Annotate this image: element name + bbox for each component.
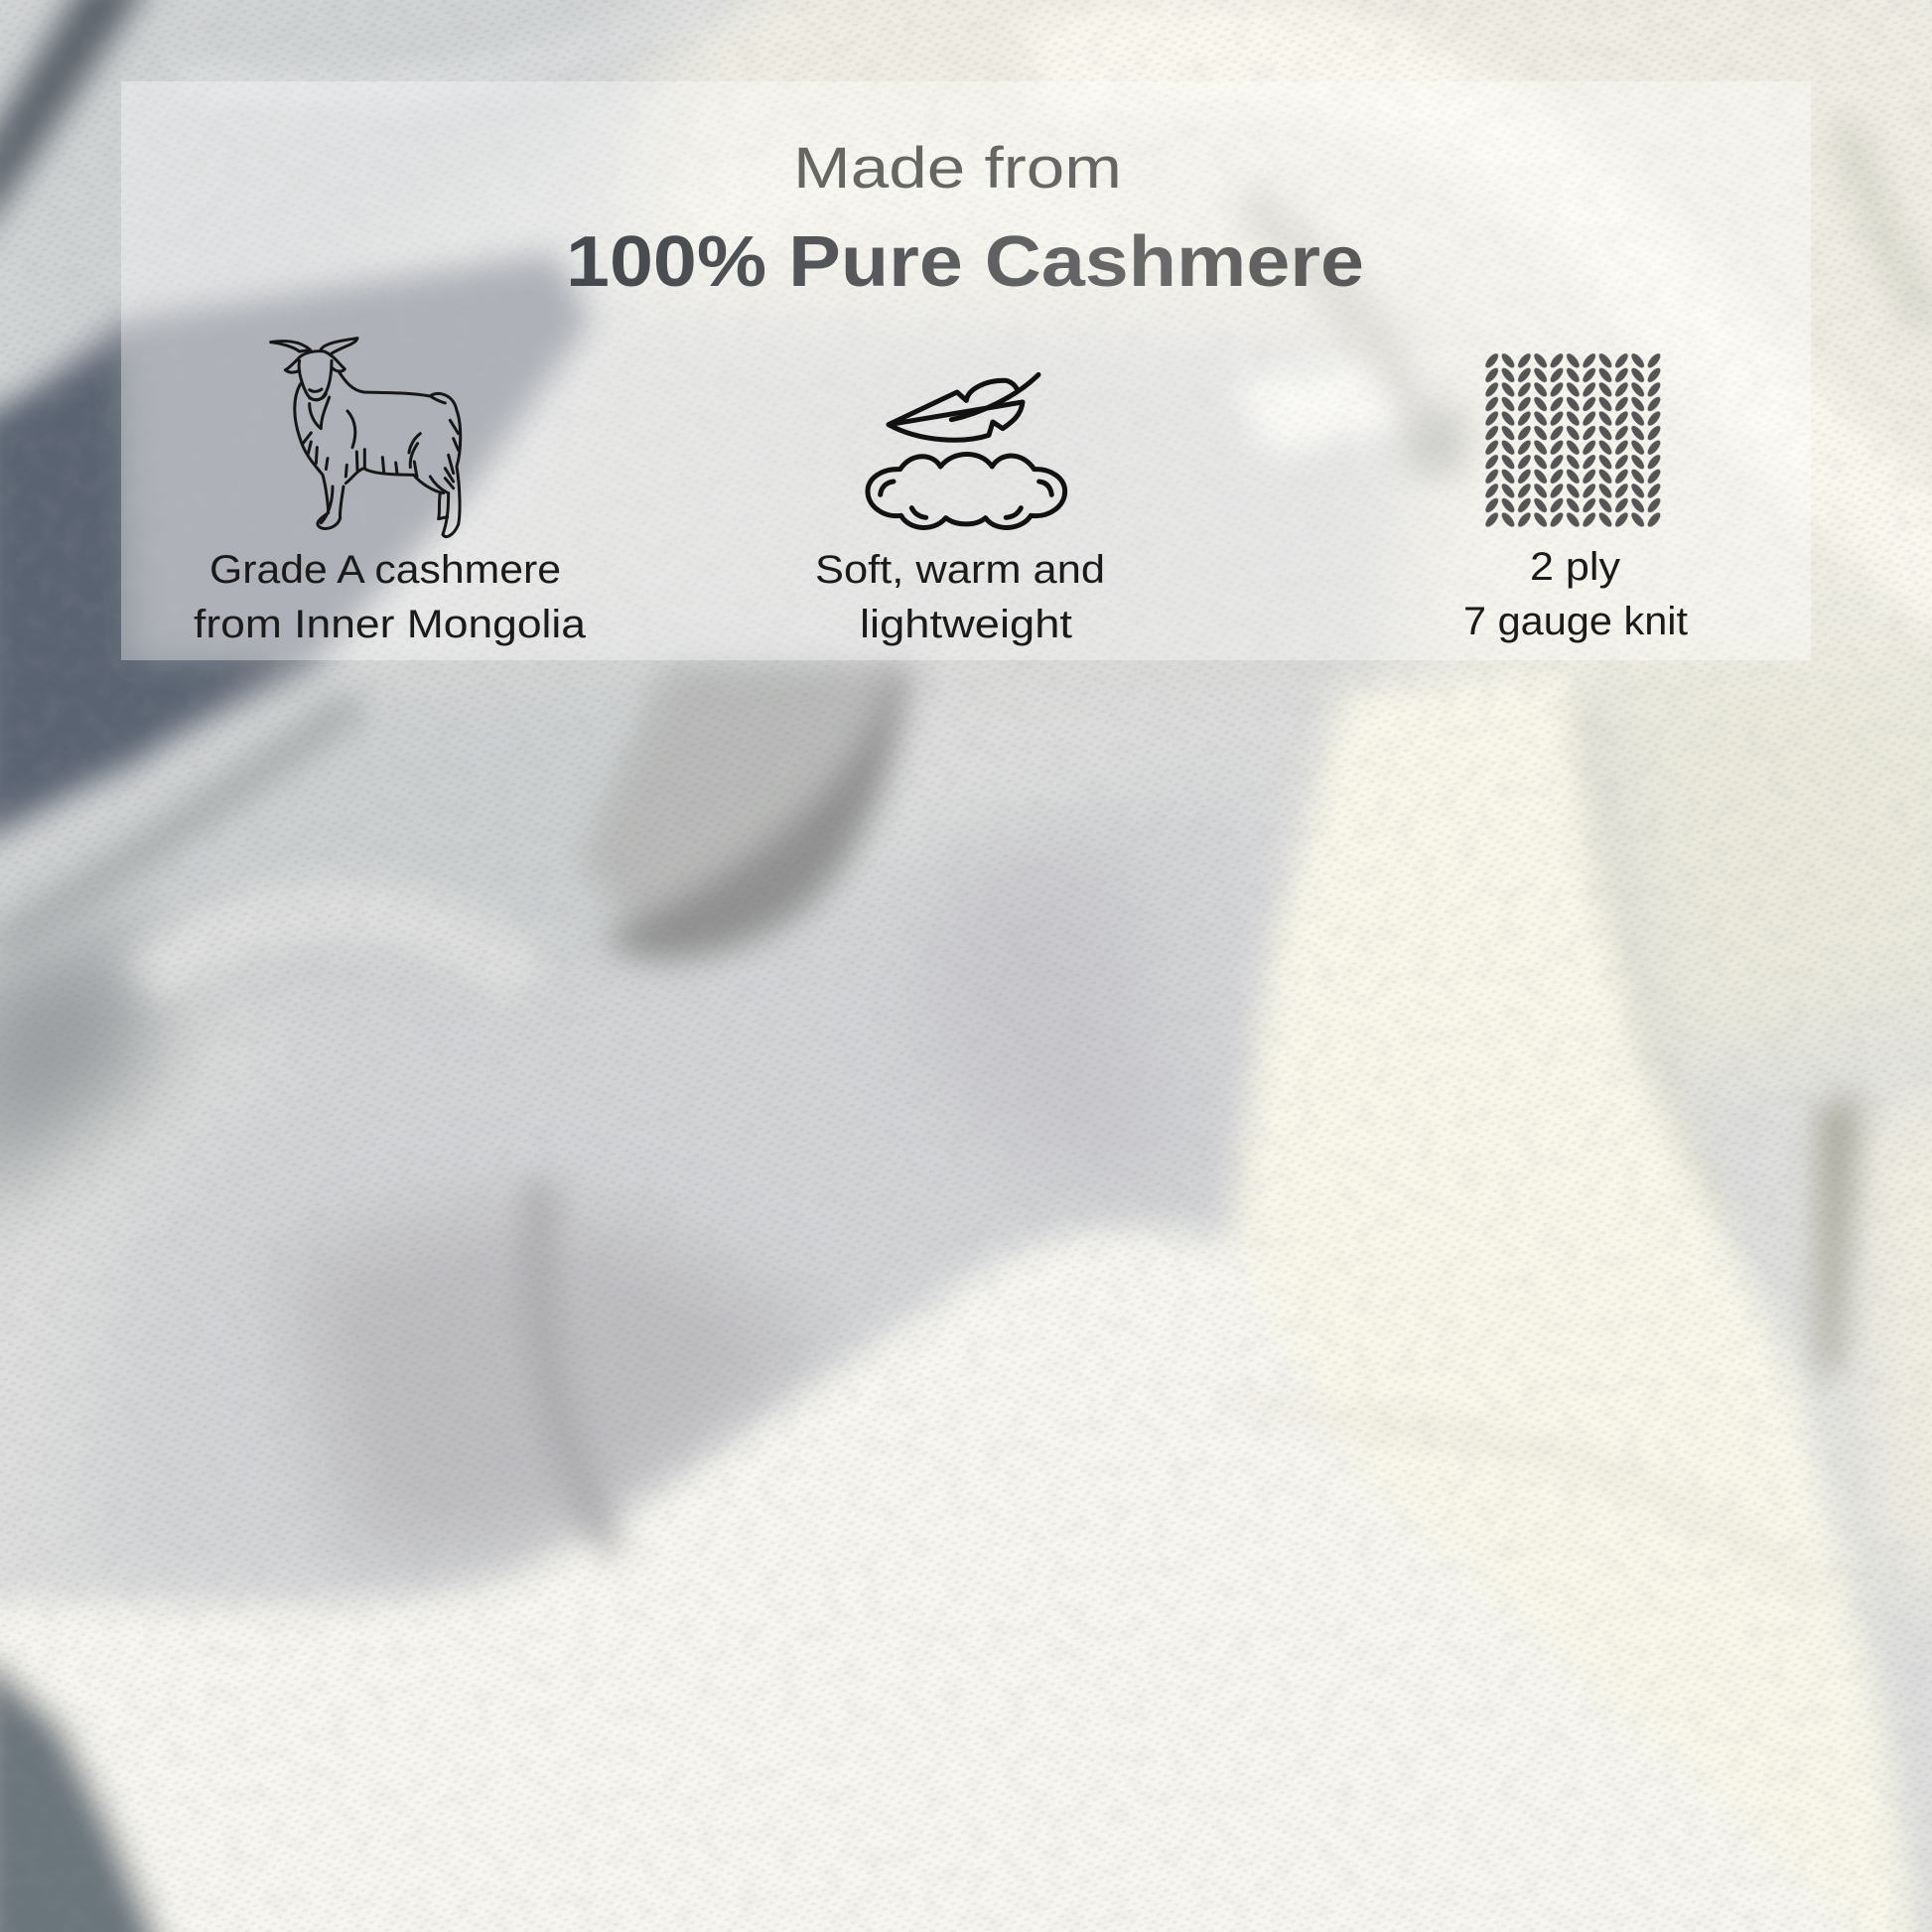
icon: knit stitch pattern xyxy=(1483,353,1662,527)
feature text: 2 ply 7 gauge knit xyxy=(1463,545,1688,643)
feature text: grade A cashmere: from Inner Mongolia xyxy=(194,603,587,646)
icon: cashmere goat xyxy=(271,339,461,537)
title: made from: Made from xyxy=(793,136,1122,201)
feature text: soft, warm and lightweight xyxy=(815,548,1105,646)
feature text: soft, warm and lightweight: Soft, warm and xyxy=(815,548,1105,592)
panel: translucent info overlay xyxy=(121,81,1811,660)
icon part: cloud xyxy=(868,454,1065,527)
feature text: 2 ply 7 gauge knit: 2 ply xyxy=(1530,545,1620,589)
feature text: soft, warm and lightweight: lightweight xyxy=(860,603,1072,646)
heading: 100% pure cashmere: 100% Pure Cashmere xyxy=(566,222,1364,302)
icon: feather above cloud xyxy=(868,374,1065,527)
feature text: 2 ply 7 gauge knit: 7 gauge knit xyxy=(1463,600,1688,643)
feature text: grade A cashmere: Grade A cashmere xyxy=(209,548,561,592)
icon part: feather xyxy=(889,374,1038,440)
feature text: grade A cashmere xyxy=(194,548,587,646)
